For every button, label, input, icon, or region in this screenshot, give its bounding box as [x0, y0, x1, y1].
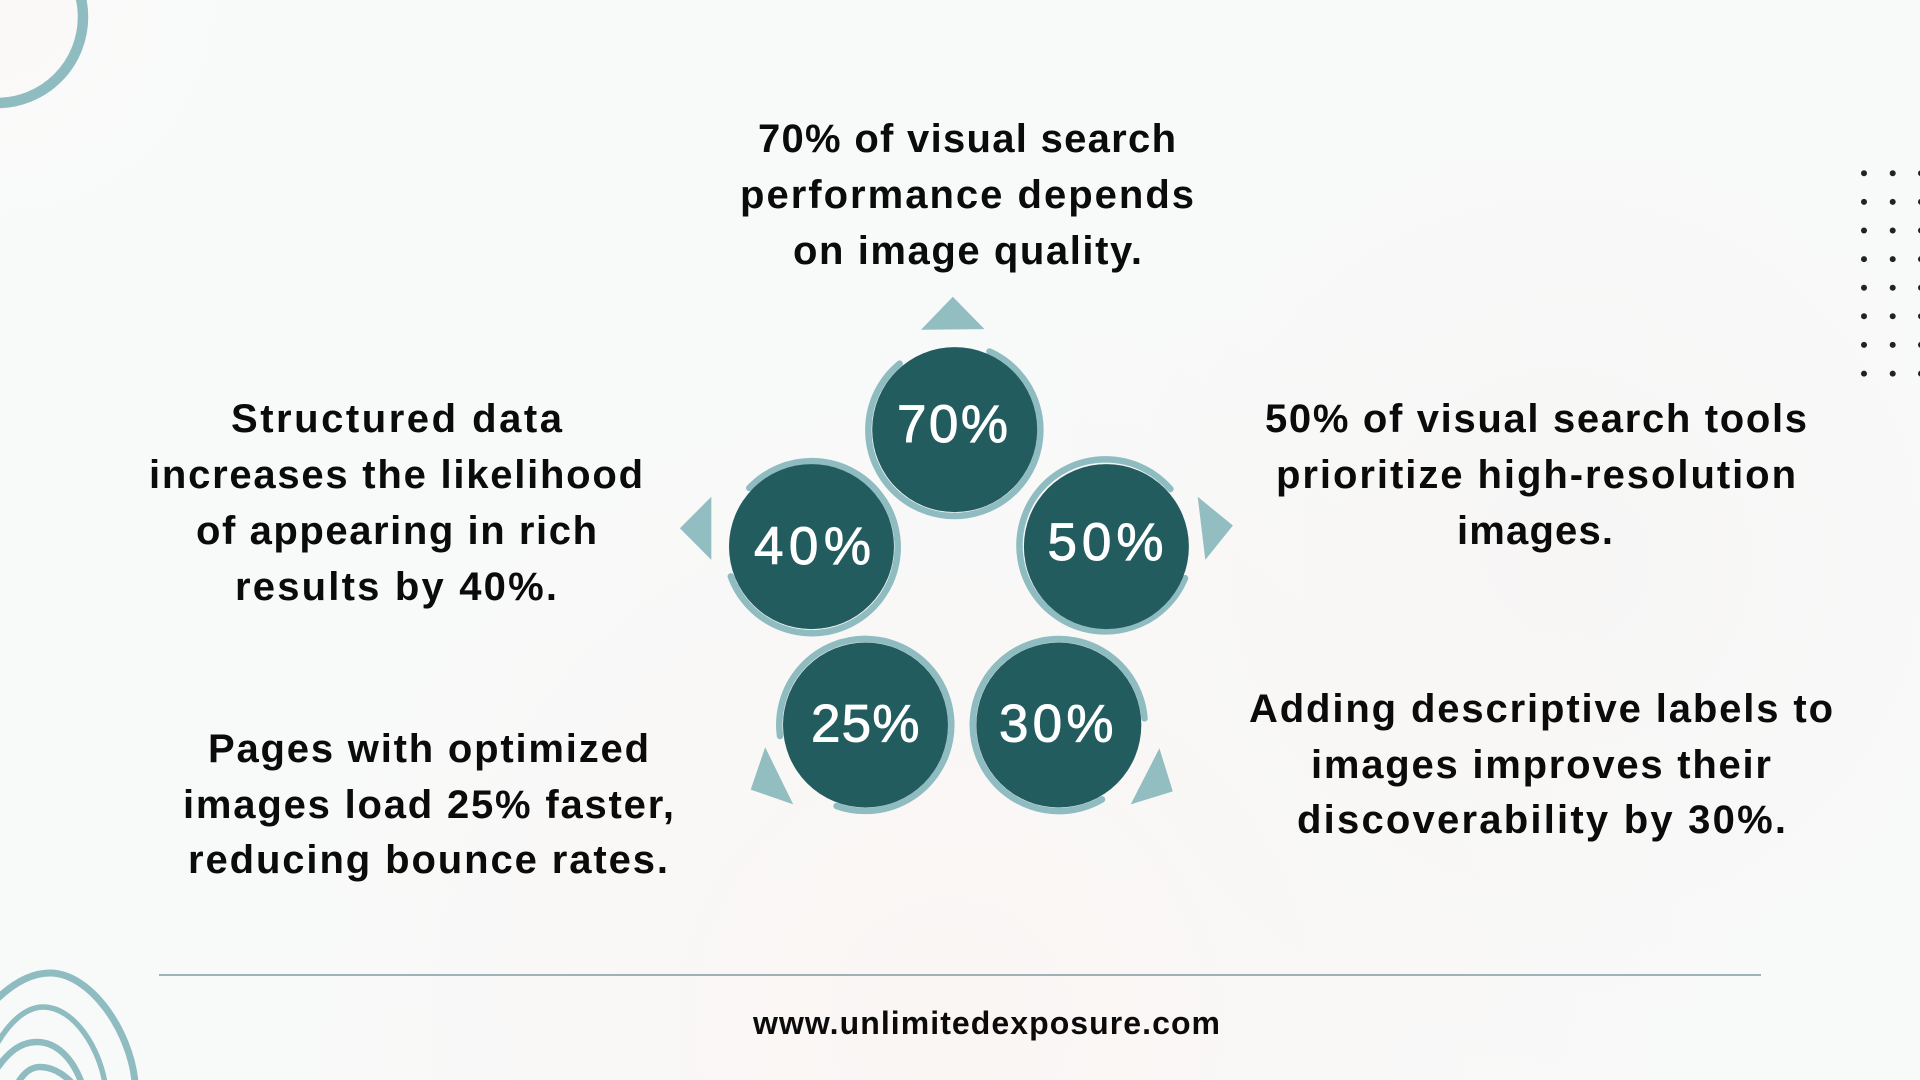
circle: 50%: 50%	[1048, 513, 1164, 572]
text block: structured data 40%: increases the likelihood	[149, 453, 643, 497]
circle: 40%: 40%	[754, 517, 871, 576]
text block: optimized images 25%	[183, 727, 674, 882]
text block: structured data 40%	[149, 397, 643, 609]
circle: 25%: 25%	[811, 695, 920, 754]
text block: descriptive labels 30%	[1249, 687, 1833, 842]
text block: descriptive labels 30%: Adding descriptive labels to	[1249, 687, 1833, 731]
text block: optimized images 25%: images load 25% faster,	[183, 783, 674, 827]
arrow: right	[1198, 497, 1233, 560]
circle: 70%	[868, 347, 1040, 516]
decoration: dot grid	[1861, 170, 1920, 377]
text block: structured data 40%: of appearing in rich	[196, 509, 597, 553]
text block: optimized images 25%: reducing bounce rates.	[188, 838, 668, 882]
circle: 30%	[973, 639, 1144, 811]
text block: 50% high-resolution	[1265, 397, 1807, 553]
decoration: fingerprint bottom-left	[0, 973, 135, 1080]
circle: 50%	[1019, 459, 1189, 631]
text block: 70% image quality: 70% of visual search	[758, 117, 1176, 161]
text block: descriptive labels 30%: images improves their	[1311, 743, 1771, 787]
circle: 30%: 30%	[999, 695, 1114, 754]
arrow: bottom left	[751, 747, 793, 804]
circle: 25%	[779, 639, 951, 811]
text block: 70% image quality	[740, 117, 1194, 273]
circle: 40%	[729, 461, 898, 633]
footer url: www.unlimitedexposure.com	[752, 1005, 1220, 1041]
circle: 70%: 70%	[897, 395, 1008, 454]
decoration: top-left arc	[0, 0, 83, 103]
arrow: top	[921, 297, 984, 330]
text block: 50% high-resolution: images.	[1457, 509, 1613, 553]
arrow: left	[680, 497, 711, 560]
text block: 50% high-resolution: 50% of visual search tools	[1265, 397, 1807, 441]
text block: optimized images 25%: Pages with optimized	[208, 727, 649, 771]
text block: descriptive labels 30%: discoverability by 30%.	[1297, 798, 1786, 842]
text block: 70% image quality: performance depends	[740, 173, 1194, 217]
text block: structured data 40%: results by 40%.	[235, 565, 557, 609]
text block: 70% image quality: on image quality.	[793, 229, 1142, 273]
text block: structured data 40%: Structured data	[231, 397, 563, 441]
text block: 50% high-resolution: prioritize high-resolution	[1276, 453, 1796, 497]
arrow: bottom right	[1131, 748, 1173, 804]
